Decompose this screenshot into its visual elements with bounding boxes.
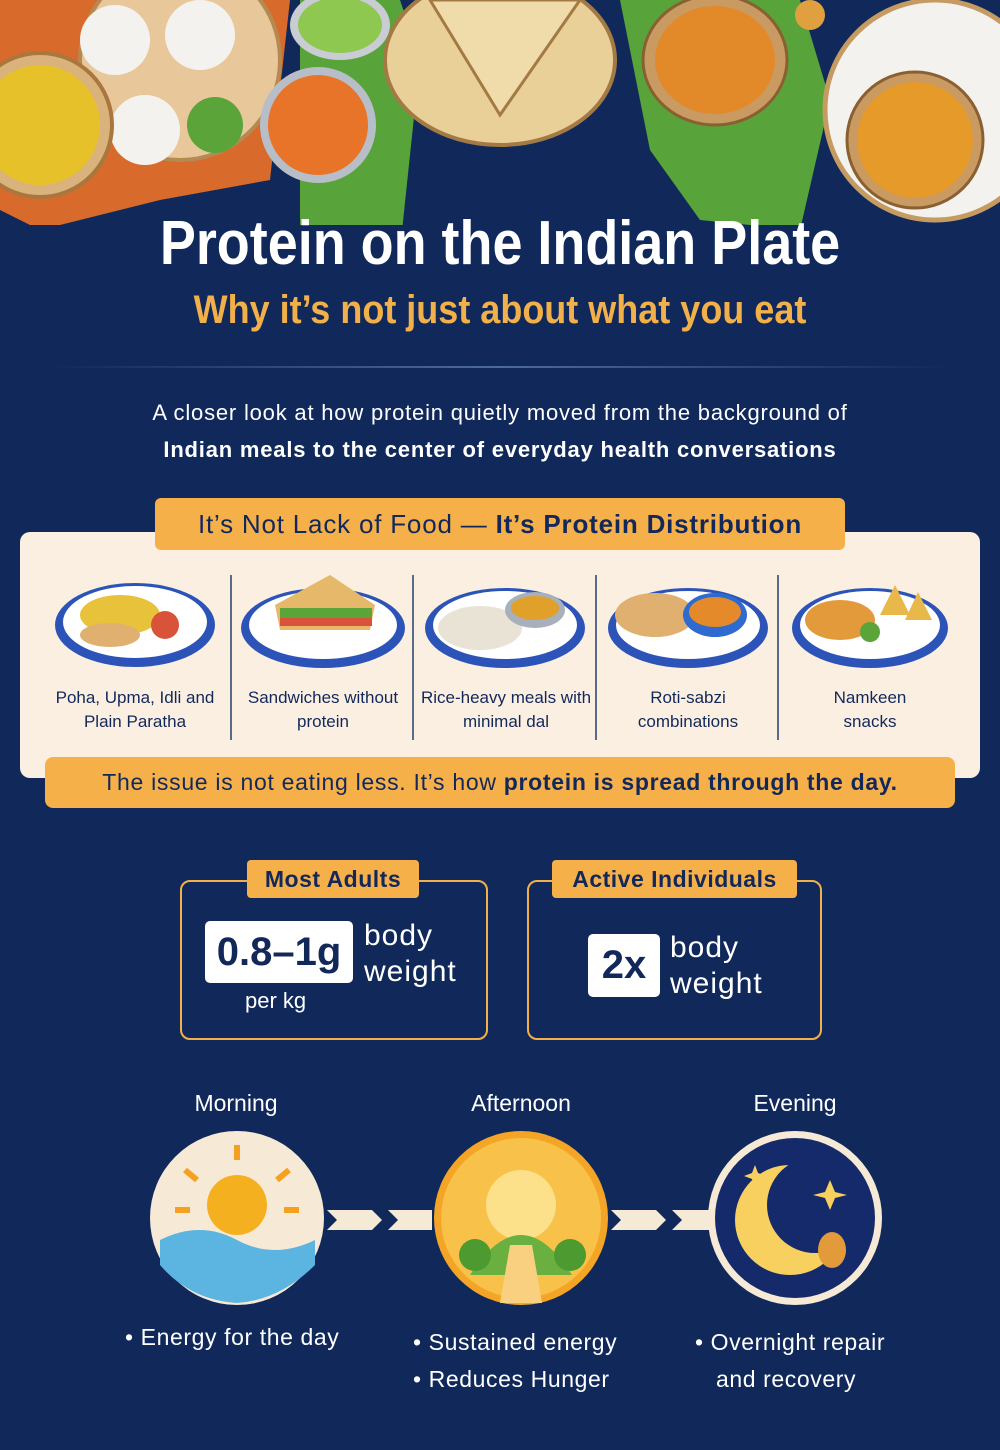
text: Namkeen — [834, 688, 906, 707]
bullets: morning: • Energy for the day — [125, 1324, 339, 1350]
bullets: evening: • Overnight repair — [695, 1329, 885, 1355]
bullets: afternoon — [413, 1329, 617, 1392]
box: active individuals: 2x — [602, 943, 646, 987]
panel heading — [155, 498, 845, 550]
callout bar: The issue is not eating less. It’s how protein is spread through the day. — [102, 769, 898, 795]
food banner — [0, 0, 1000, 225]
intro text: Indian meals to the center of everyday health conversations — [163, 437, 837, 462]
box: active individuals: Active Individuals — [572, 866, 777, 892]
text: Sandwiches without protein — [248, 688, 398, 731]
subtitle: Why it’s not just about what you eat — [194, 288, 806, 332]
text: Rice-heavy meals with minimal dal — [421, 688, 591, 731]
time labels: Morning — [194, 1090, 278, 1116]
bullets: evening: and recovery — [716, 1366, 856, 1392]
food labels — [56, 688, 906, 731]
bullets: afternoon: • Sustained energy — [413, 1329, 617, 1355]
intro text — [152, 400, 848, 462]
text: snacks — [844, 712, 896, 731]
callout bar — [45, 757, 955, 808]
box: most adults: Most Adults — [265, 866, 401, 892]
box: most adults: body — [364, 919, 433, 952]
panel: protein distribution — [20, 498, 980, 778]
box: most adults: weight — [364, 955, 457, 988]
box: most adults: per kg — [245, 988, 306, 1013]
panel heading: It’s Not Lack of Food — It’s Protein Distribution — [198, 509, 802, 539]
bullets: afternoon: • Reduces Hunger — [413, 1366, 610, 1392]
text: Roti-sabzi combinations — [638, 688, 738, 731]
box: active individuals: weight — [670, 967, 763, 1000]
text: Afternoon — [471, 1090, 571, 1116]
food plates — [55, 575, 948, 668]
title: Protein on the Indian Plate — [160, 209, 840, 278]
intro text: A closer look at how protein quietly moved from the background of — [152, 400, 848, 425]
text: Poha, Upma, Idli and Plain Paratha — [56, 688, 214, 731]
box: active individuals — [527, 860, 822, 1040]
box: active individuals: body — [670, 931, 739, 964]
bullets: evening — [695, 1329, 885, 1392]
box: most adults: 0.8–1g — [217, 930, 341, 974]
box: most adults — [180, 860, 488, 1040]
text: Evening — [753, 1090, 837, 1116]
timeline icons and arrows — [150, 1131, 882, 1305]
